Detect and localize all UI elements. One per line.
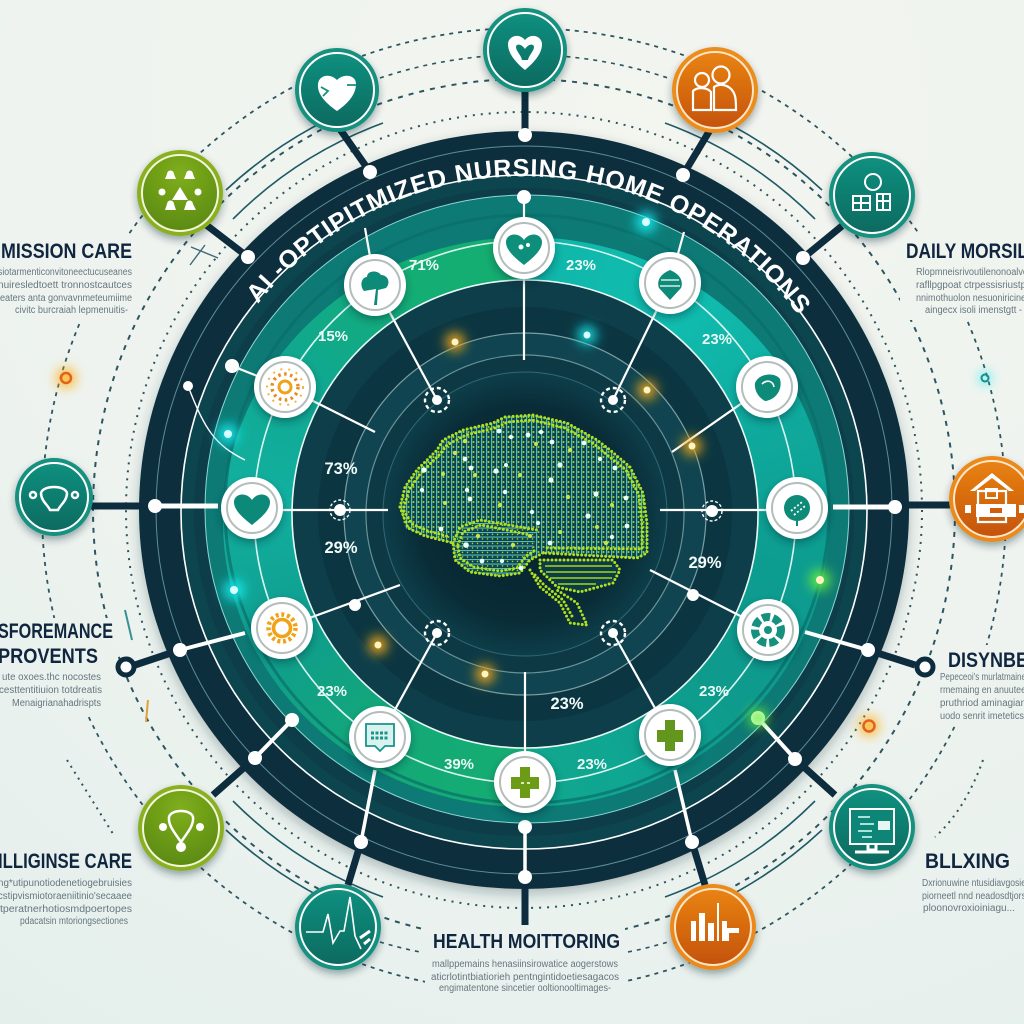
icon: right orange house — [949, 456, 1024, 542]
bottom block: Health Monitoring: HEALTH MOITTORING — [433, 931, 620, 953]
icon: computer — [829, 784, 915, 870]
spokes: white bright bars — [155, 506, 895, 877]
inner icon nodes — [221, 217, 828, 813]
spokes: navy connectors to outer icons — [85, 90, 950, 925]
gear nodes on dial — [330, 388, 722, 645]
percentage labels: 23% — [577, 756, 607, 773]
percentage labels: 23% — [699, 683, 729, 700]
node: leaf shield — [736, 356, 798, 418]
percentage labels: 23% — [702, 331, 732, 348]
end rings: navy terminals — [118, 659, 933, 675]
bottom block: Health Monitoring: engimatentone sincetier ooltionooltimages- — [439, 983, 611, 994]
side block: Performance Improvements: cesttentitiuion totdreatis — [0, 685, 102, 696]
icon: city orange — [670, 884, 756, 970]
icon: building teal — [829, 152, 915, 238]
node: heart left — [221, 477, 283, 539]
spokes: inner white connectors — [188, 197, 797, 782]
percentage labels: 29% — [324, 539, 358, 557]
node: sun dots — [254, 356, 316, 418]
side block: Admission Care — [0, 240, 132, 316]
side block: Disynbe — [940, 649, 1024, 722]
node: dome — [639, 252, 701, 314]
node: globe right — [766, 477, 828, 539]
percentage labels: 39% — [444, 756, 474, 773]
node: green cross bottom — [494, 751, 556, 813]
side block: Admission Care: nuiresledtoett tronnostcautces — [0, 280, 132, 291]
percentage labels — [317, 257, 732, 773]
side block: Intelligence Care: pdacatsin mtoriongsectiones — [20, 916, 128, 927]
node: flower right — [737, 599, 799, 661]
node: sun lower left — [251, 597, 313, 659]
outer disc — [139, 131, 909, 889]
ring: bright teal and green segment band — [223, 237, 829, 807]
percentage labels: 23% — [317, 683, 347, 700]
side block: Billing: BLLXING — [925, 850, 1010, 873]
inner dark dial — [292, 280, 758, 748]
side block: Billing: ploonovroxioiniagu... — [923, 903, 1015, 914]
brain — [400, 415, 647, 625]
node: heart top — [493, 217, 555, 279]
percentage labels: 23% — [550, 695, 584, 713]
glow lights — [57, 212, 990, 735]
node: tree — [344, 254, 406, 316]
bottom block: Health Monitoring: mallppemains henasiinsirowatice aogerstows — [432, 959, 618, 970]
node: screen chat — [349, 706, 411, 768]
side block: Admission Care: eaters anta gonvavnmeteumiime — [0, 293, 132, 304]
side block: Performance Improvements — [0, 620, 113, 709]
side block: Billing — [922, 850, 1024, 914]
percentage labels: 23% — [566, 257, 596, 274]
side block: Performance Improvements: Menaigrianahadrispts — [12, 698, 101, 709]
percentage labels: 71% — [409, 257, 439, 274]
bottom block: Health Monitoring — [431, 931, 620, 994]
side block: Admission Care: civitc burcraiah lepmenuitis- — [15, 305, 128, 316]
icon: left teal — [15, 458, 93, 536]
icon: heartbeat — [295, 884, 381, 970]
percentage labels: 15% — [318, 328, 348, 345]
percentage labels: 29% — [688, 554, 722, 572]
side block: Performance Improvements: ute oxoes.thc nocostes — [2, 672, 101, 683]
side block: Admission Care: siotarmenticonvitoneectucuseanes — [0, 267, 132, 278]
node: green cross right — [639, 704, 701, 766]
side block: Intelligence Care: tperatnerhotiosmdpoertopes — [0, 904, 132, 915]
icon: top heart — [483, 8, 567, 92]
icon: people orange — [672, 47, 758, 133]
side block: Intelligence Care: ng*utipunotiodenetiogebruisies — [0, 878, 132, 889]
connector dots — [148, 128, 902, 884]
icon: heart upper left — [295, 48, 379, 132]
icon: people green — [137, 150, 223, 236]
percentage labels: 73% — [324, 460, 358, 478]
icon: lightbulb green — [138, 785, 224, 871]
side block: Performance Improvements: PROVENTS — [0, 645, 98, 668]
bottom block: Health Monitoring: aticrlotintbiatiorieh pentngintidoetiesagacos — [431, 972, 619, 983]
title: AI -OPTIPITMIZED NURSING HOME OPERATIONS — [249, 158, 810, 312]
side block: Intelligence Care: ILLIGINSE CARE — [0, 850, 132, 873]
ring lines on bright band — [225, 215, 829, 803]
side block: Admission Care: IMISSION CARE — [0, 240, 132, 263]
side block: Performance Improvements: SFOREMANCE — [0, 620, 113, 643]
side block: Daily Morsil — [906, 240, 1024, 316]
side block: Intelligence Care — [0, 850, 132, 927]
side block: Intelligence Care: cstipvismiotoraeniitinio'secaaee — [0, 891, 132, 902]
